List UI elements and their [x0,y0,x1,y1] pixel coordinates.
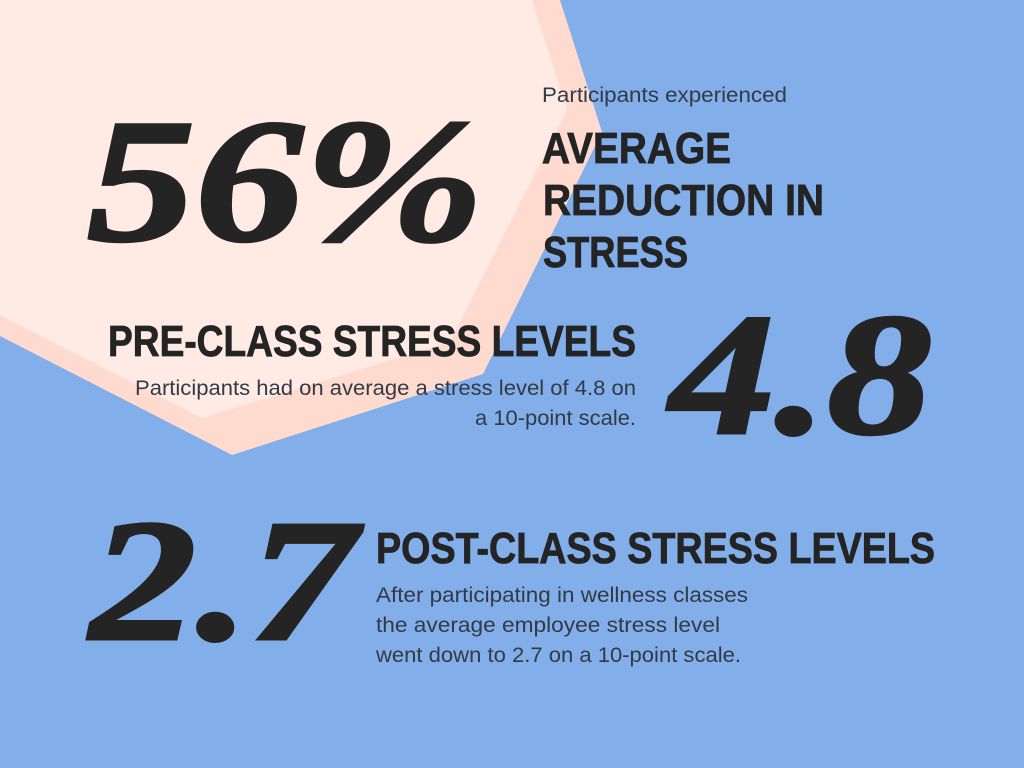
heading: average reduction in stress: STRESS [543,228,688,277]
outer pink polygon [0,0,602,455]
heading: pre-class stress levels: PRE-CLASS STRESS LEVELS [108,317,636,366]
post-class description: After participating in wellness classes [376,584,748,607]
post-class description: the average employee stress level [376,614,720,637]
heading: average reduction in stress [542,124,824,277]
pre-class description: a 10-point scale. [475,407,636,430]
heading: post-class stress levels: POST-CLASS STRESS LEVELS [376,524,935,573]
heading: average reduction in stress: REDUCTION IN [543,176,824,225]
heading: average reduction in stress: AVERAGE [542,124,731,173]
stat: 4.8: 4.8 [666,278,932,471]
pre-class description [135,377,636,430]
post-class description: went down to 2.7 on a 10-point scale. [375,644,741,667]
pre-class description: Participants had on average a stress level of 4.8 on [135,377,636,400]
inner light polygon [0,0,567,418]
post-class description [375,584,748,667]
stat: 56 percent: 56% [87,84,484,279]
stat: 2.7: 2.7 [86,484,363,677]
lead-in text: Participants experienced [542,84,787,107]
